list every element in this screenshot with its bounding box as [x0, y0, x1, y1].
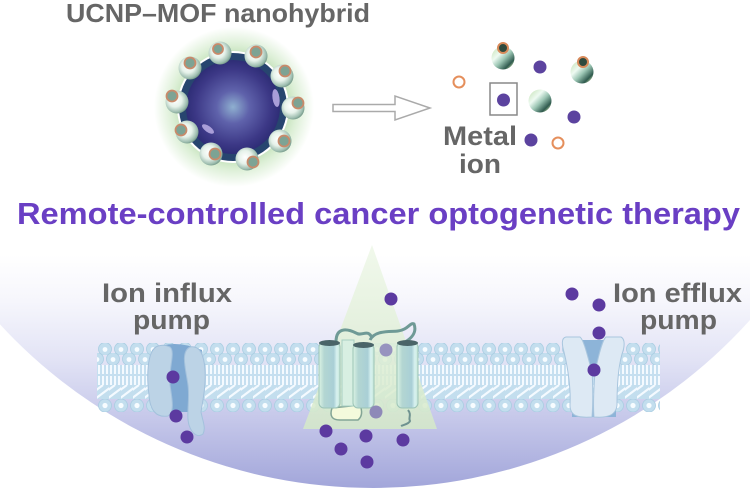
light cone — [303, 245, 437, 429]
ions at channel — [320, 292, 410, 468]
label: ion influx pump: pump — [133, 305, 210, 335]
ion influx pump protein — [148, 344, 205, 436]
background bowl gradient — [0, 297, 750, 488]
ions at efflux pump — [566, 288, 606, 376]
label: metal ion: Metal — [443, 121, 517, 151]
icon: UCNP-MOF nanoparticle — [154, 27, 314, 187]
optogenetic channel protein — [319, 324, 418, 426]
released components — [454, 43, 594, 148]
arrow — [333, 96, 430, 120]
metal ion box — [490, 83, 517, 115]
heading: remote-controlled therapy: Remote-controlled cancer optogenetic therapy — [17, 196, 741, 231]
label: metal ion: ion — [459, 149, 501, 179]
ions at influx pump — [166, 370, 194, 444]
label: ion efflux pump: pump — [640, 305, 717, 335]
ion efflux pump protein — [562, 337, 624, 417]
lipid bilayer membrane — [97, 343, 660, 412]
label: ion efflux pump: Ion efflux — [613, 278, 742, 308]
label: ion influx pump: Ion influx — [102, 278, 232, 308]
